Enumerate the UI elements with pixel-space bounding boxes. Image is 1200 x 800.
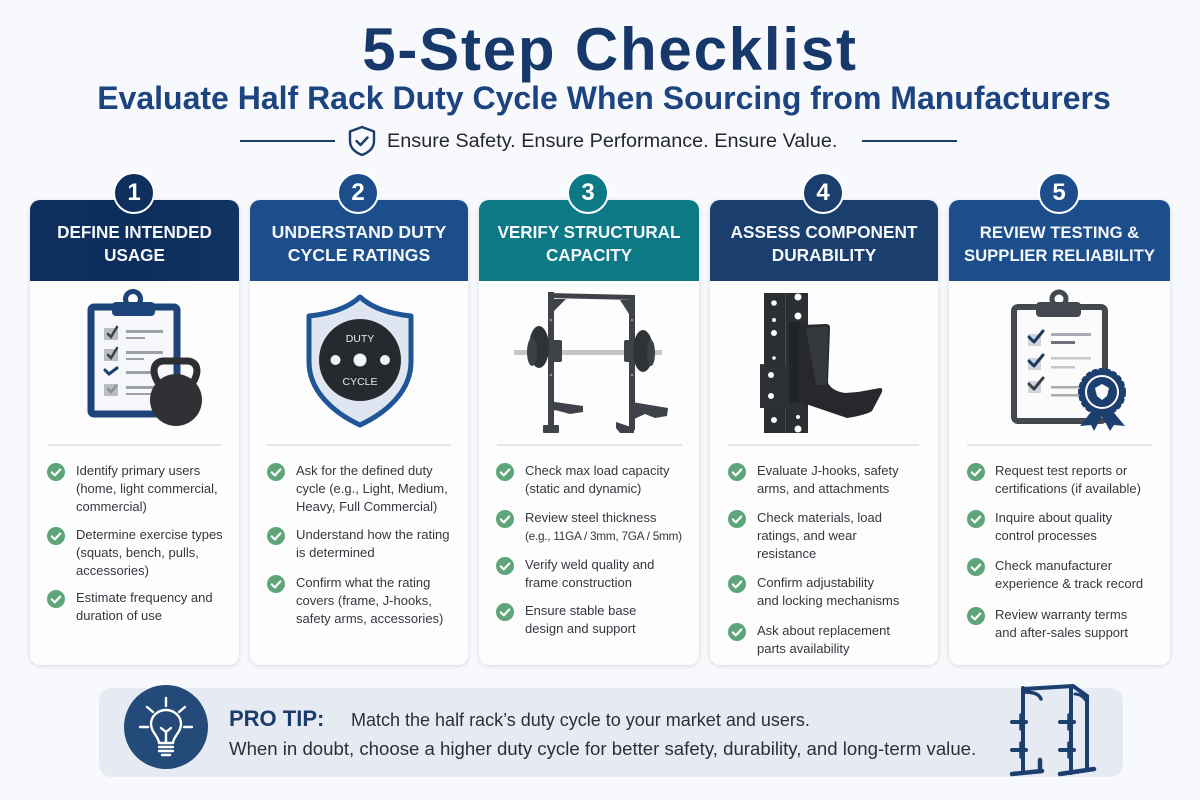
item: ensure stable base: design and support — [525, 621, 636, 636]
item: request test reports — [967, 463, 1141, 496]
item: inquire about quality control: control processes — [995, 528, 1097, 543]
item: ask about replacement parts: parts availability — [757, 641, 850, 656]
item: identify primary users — [47, 463, 218, 514]
step 3 header: CAPACITY — [546, 246, 632, 265]
step 1 number badge: 1 — [127, 179, 141, 206]
icon: clipboard with ribbon seal — [1011, 290, 1126, 431]
pro tip line 1: Match the half rack’s duty cycle to your market and users. — [351, 710, 810, 730]
panel: step 1 define intended usage — [30, 200, 239, 665]
icon: shield with weight plate: DUTY — [346, 333, 374, 345]
item: check manufacturer experience: Check manufacturer — [995, 558, 1112, 573]
step 3 number badge: 3 — [581, 179, 595, 206]
item: confirm adjustability: and locking mechanisms — [757, 593, 899, 608]
item: check materials: Check materials, load — [757, 510, 882, 525]
item: estimate frequency — [47, 590, 213, 623]
item: evaluate J-hooks — [728, 463, 899, 496]
icon: half rack with barbell — [514, 292, 668, 433]
item: request test reports: certifications (if available) — [995, 481, 1141, 496]
item: ensure stable base — [496, 603, 636, 636]
divider — [728, 444, 919, 446]
icon: light bulb — [124, 685, 208, 769]
item: review warranty terms: Review warranty terms — [995, 607, 1127, 622]
divider — [967, 444, 1152, 446]
step 1 header — [30, 200, 239, 281]
step 2 header — [250, 200, 468, 281]
item: review warranty terms: and after-sales support — [995, 625, 1128, 640]
panel: step 3 verify structural capacity — [479, 200, 699, 665]
step 1 header: DEFINE INTENDED — [57, 223, 212, 242]
item: understand rating: Understand how the rating — [296, 527, 450, 542]
item: review steel thickness: (e.g., 11GA / 3mm, 7GA / 5mm) — [525, 529, 682, 543]
step 2 number badge — [337, 172, 379, 214]
step 5 number badge — [1038, 172, 1080, 214]
item: confirm rating covers: Confirm what the rating — [296, 575, 430, 590]
pro tip line 1: PRO TIP: — [229, 706, 324, 731]
item: identify primary users: Identify primary users — [76, 463, 200, 478]
step 1 header: USAGE — [104, 246, 165, 265]
step 5 number badge: 5 — [1052, 179, 1066, 206]
item: understand rating: is determined — [296, 545, 375, 560]
pro tip line 2: When in doubt, choose a higher duty cycle for better safety, durability, and long-term value. — [229, 738, 976, 759]
item: estimate frequency: Estimate frequency and — [76, 590, 213, 605]
item: check manufacturer experience: experience & track record — [995, 576, 1143, 591]
item: check max load — [496, 463, 670, 496]
item: evaluate J-hooks: Evaluate J-hooks, safety — [757, 463, 899, 478]
item: estimate frequency: duration of use — [76, 608, 162, 623]
step 2 header: UNDERSTAND DUTY — [272, 222, 446, 242]
item: determine exercise types: Determine exercise types — [76, 527, 223, 542]
step 3 header: VERIFY STRUCTURAL — [498, 223, 680, 242]
item: verify weld quality: Verify weld quality and — [525, 557, 654, 572]
panel: step 2 understand duty cycle ratings: safety arms, accessories) — [296, 611, 443, 626]
step 4 header: ASSESS COMPONENT — [731, 222, 917, 242]
callout: pro tip — [99, 688, 1123, 777]
item: check max load: (static and dynamic) — [525, 481, 641, 496]
item: verify weld quality — [496, 557, 654, 590]
item: verify weld quality: frame construction — [525, 575, 632, 590]
step 2 number badge: 2 — [351, 179, 365, 206]
item: ensure stable base: Ensure stable base — [525, 603, 636, 618]
item: confirm adjustability: Confirm adjustability — [757, 575, 874, 590]
item: check max load: Check max load capacity — [525, 463, 670, 478]
divider — [497, 444, 682, 446]
step 3 header — [479, 200, 699, 281]
item: evaluate J-hooks: arms, and attachments — [757, 481, 889, 496]
step 3 number badge — [567, 172, 609, 214]
icon: shield check — [348, 126, 376, 156]
title: 5-Step Checklist — [362, 16, 858, 83]
panel: step 5 review testing and supplier reliability — [949, 200, 1170, 665]
panel: step 2 understand duty cycle ratings: Heavy, Full Commercial) — [296, 499, 437, 514]
item: ask for defined duty cycle — [267, 463, 448, 514]
item: confirm rating covers — [267, 575, 443, 626]
step 4 header — [710, 200, 938, 281]
panel: step 1 define intended usage: commercial) — [76, 499, 147, 514]
icon: J-hook on upright — [760, 293, 882, 433]
tagline row — [240, 126, 957, 156]
item: confirm adjustability — [728, 575, 899, 608]
step 1 number badge — [113, 172, 155, 214]
panel: step 4 assess component durability — [710, 200, 938, 665]
step 5 header: REVIEW TESTING & — [980, 223, 1139, 242]
icon: shield with weight plate: CYCLE — [342, 376, 378, 388]
pro tip line 1 — [229, 706, 810, 731]
step 5 header — [949, 200, 1170, 281]
step 5 header: SUPPLIER RELIABILITY — [964, 246, 1155, 265]
item: ask about replacement parts: Ask about replacement — [757, 623, 890, 638]
step 2 header: CYCLE RATINGS — [288, 245, 430, 265]
item: check manufacturer experience — [967, 558, 1143, 591]
item: determine exercise types — [47, 527, 223, 578]
item: request test reports: Request test reports or — [995, 463, 1127, 478]
item: inquire about quality control: Inquire about quality — [995, 510, 1112, 525]
panel: step 2 understand duty cycle ratings — [250, 200, 468, 665]
icon: clipboard and kettlebell — [88, 289, 202, 426]
tagline text: Ensure Safety. Ensure Performance. Ensure Value. — [387, 130, 837, 152]
item: determine exercise types: (squats, bench, pulls, — [76, 545, 199, 560]
subtitle: Evaluate Half Rack Duty Cycle When Sourcing from Manufacturers — [97, 80, 1111, 116]
step 4 header: DURABILITY — [772, 245, 876, 265]
step 4 number badge — [802, 172, 844, 214]
divider — [267, 444, 451, 446]
panel: step 4 assess component durability: resistance — [757, 546, 816, 561]
item: ask about replacement parts — [728, 623, 890, 656]
item: identify primary users: (home, light commercial, — [76, 481, 218, 496]
item: check materials: ratings, and wear — [757, 528, 857, 543]
item: check materials — [728, 510, 882, 561]
divider — [48, 444, 221, 446]
item: review steel thickness — [496, 510, 682, 543]
panel: step 1 define intended usage: accessories) — [76, 563, 149, 578]
step 4 number badge: 4 — [816, 179, 830, 206]
item: review warranty terms — [967, 607, 1128, 640]
icon: mini half rack — [1010, 684, 1096, 776]
icon: shield with weight plate — [306, 294, 414, 428]
item: confirm rating covers: covers (frame, J-hooks, — [296, 593, 432, 608]
item: ask for defined duty cycle: cycle (e.g., Light, Medium, — [296, 481, 448, 496]
item: review steel thickness: Review steel thickness — [525, 510, 656, 525]
item: understand rating — [267, 527, 450, 560]
item: ask for defined duty cycle: Ask for the defined duty — [296, 463, 433, 478]
item: inquire about quality control — [967, 510, 1112, 543]
